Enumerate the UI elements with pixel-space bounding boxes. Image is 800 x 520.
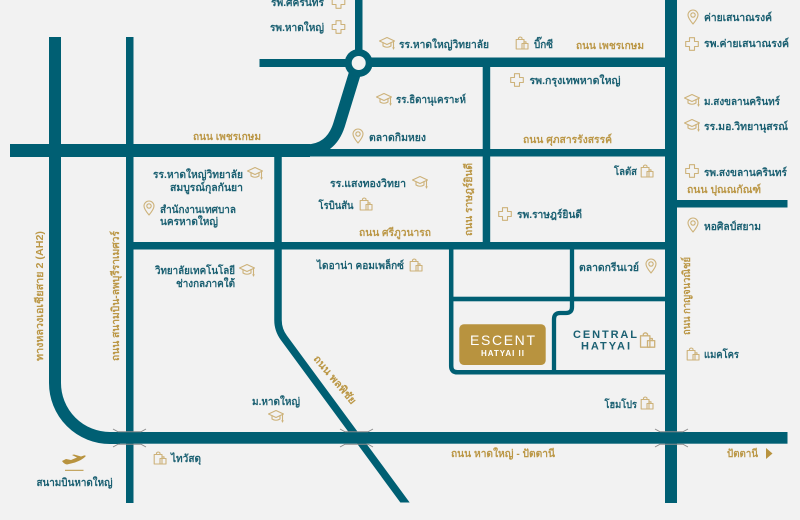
place: Kim Yong market: ตลาดกิมหยง — [369, 132, 426, 144]
place: Hatyai hospital: รพ.หาดใหญ่ — [270, 20, 324, 34]
road name: Hatyai-Pattani: ถนน หาดใหญ่ - ปัตตานี — [451, 446, 556, 460]
place: Siam art gallery: หอศิลป์สยาม — [704, 220, 761, 233]
road: Phetkasem west — [10, 144, 310, 157]
place: Makro — [687, 348, 739, 361]
place: Lotus — [613, 165, 653, 178]
road name: Kanchanawanit: ถนน กาญจนวณิชย์ — [680, 257, 693, 335]
place: Senanarong camp: ค่ายเสนาณรงค์ — [704, 11, 772, 24]
place: Thai Watsadu — [154, 452, 201, 466]
place: Hatyai Wittayalai school — [380, 37, 489, 51]
label: Central Hatyai: CENTRAL — [573, 329, 637, 341]
place: Songkla hospital: รพ.สงขลานครินทร์ — [704, 166, 787, 179]
place: municipality: นครหาดใหญ่ — [160, 214, 218, 228]
place: Lotus: โลตัส — [613, 165, 638, 178]
road name: airport road: ถนน สนามบิน-ลพบุรีราเมศวร์ — [109, 231, 123, 361]
overpass marker 2 — [340, 429, 373, 447]
place: Big C: บิ๊กซี — [534, 36, 553, 51]
place: technical college: วิทยาลัยเทคโนโลยี — [154, 264, 235, 277]
place: Hatyai University — [252, 394, 300, 422]
place: technical college — [154, 264, 254, 290]
place: PSU school — [684, 120, 788, 134]
place: Thai Watsadu: ไทวัสดุ — [170, 452, 201, 466]
place: Somboon Kunkanya school: สมบูรณ์กุลกันยา — [170, 181, 243, 195]
road: project connector — [554, 249, 572, 372]
place: Robinson — [318, 198, 372, 212]
overpass marker 3 — [655, 429, 688, 447]
place: Kim Yong market — [353, 129, 426, 144]
place: Songkla University: ม.สงขลานครินทร์ — [704, 95, 780, 108]
place: Robinson: โรบินสัน — [318, 199, 354, 212]
logo: ESCENT Hatyai II: ESCENT — [470, 332, 535, 348]
logo: ESCENT Hatyai II: HATYAI II — [481, 349, 524, 358]
place: Siam art gallery — [688, 218, 761, 233]
label: Central Hatyai — [573, 329, 637, 352]
direction: Pattani — [727, 447, 772, 460]
place: Hatyai University: ม.หาดใหญ่ — [252, 394, 300, 408]
roundabout — [345, 49, 373, 77]
road: project loop — [451, 249, 665, 372]
road: top west — [260, 59, 350, 67]
road: Phetkasem curve to roundabout — [306, 63, 358, 150]
road name: Ratyindee: ถนน ราษฎร์ยินดี — [462, 163, 475, 236]
place: Hatyai Wittayalai school: รร.หาดใหญ่วิทยาลัย — [399, 37, 489, 51]
road: top east — [365, 58, 665, 67]
place: municipality: สำนักงานเทศบาล — [160, 204, 236, 216]
place: Ratyindee hospital — [499, 208, 582, 221]
road name: Punnakan: ถนน ปุณณกัณฑ์ — [687, 183, 761, 197]
place: Thida school — [376, 93, 466, 107]
place: HomePro: โฮมโปร — [604, 398, 637, 411]
place: Songkla University — [684, 94, 780, 108]
road name: Asian Highway: ทางหลวงเอเชียสาย 2 (AH2) — [33, 231, 46, 361]
road: Sriphuwanart — [133, 242, 665, 250]
place: Senanarong hospital: รพ.ค่ายเสนาณรงค์ — [704, 37, 789, 50]
road name: Phonphichai: ถนน พลพิชัย — [311, 353, 358, 407]
place: Bangkok Hospital: รพ.กรุงเทพหาดใหญ่ — [530, 73, 621, 88]
road: main north-south — [665, 0, 677, 503]
road name: Phetkasem west: ถนน เพชรเกษม — [193, 131, 261, 143]
place: Hatyai hospital — [270, 20, 345, 34]
road name: Sriphuwanart: ถนน ศรีภูวนารถ — [359, 226, 431, 240]
place: Makro: แมคโคร — [704, 348, 739, 361]
place: Greenway market: ตลาดกรีนเวย์ — [579, 261, 639, 274]
road: highway AH2 curve — [55, 37, 120, 438]
place: Thida school: รร.ธิดานุเคราะห์ — [396, 93, 466, 107]
place: Big C — [516, 36, 553, 51]
road: airport road — [126, 37, 134, 503]
road: Phetkasem east — [300, 149, 665, 156]
overpass marker 1 — [113, 429, 146, 447]
place: HomePro — [604, 397, 653, 411]
direction: Pattani: ปัตตานี — [727, 447, 759, 460]
road name: Phetkasem north: ถนน เพชรเกษม — [576, 40, 644, 52]
road: project north — [453, 297, 665, 301]
road: Phonphichai — [278, 157, 412, 512]
place: Diana Complex: ไดอาน่า คอมเพล็กซ์ — [316, 258, 404, 272]
place: Bangkok Hospital — [511, 73, 621, 88]
place: municipality — [144, 201, 236, 228]
place: Somboon Kunkanya school: รร.หาดใหญ่วิทยาลัย — [153, 167, 243, 181]
place: Senanarong camp — [688, 10, 772, 24]
place: Saengthong school: รร.แสงทองวิทยา — [330, 178, 406, 190]
place: Saengthong school — [330, 176, 428, 190]
label: Central Hatyai: HATYAI — [581, 340, 630, 352]
place: technical college: ช่างกลภาคใต้ — [176, 276, 235, 290]
place: PSU school: รร.มอ.วิทยานุสรณ์ — [704, 120, 788, 134]
road: Hatyai-Pattani — [110, 432, 788, 444]
road name: Suphasarn: ถนน ศุภสารรังสรรค์ — [523, 133, 612, 147]
place: Somboon Kunkanya school — [153, 167, 262, 195]
road: Punnakan spur — [677, 200, 788, 208]
logo: ESCENT Hatyai II — [459, 324, 546, 365]
road: Ratyindee — [483, 67, 490, 247]
place: Ratyindee hospital: รพ.ราษฎร์ยินดี — [517, 208, 582, 221]
road: north stub — [355, 0, 362, 60]
place: Hatyai airport — [36, 454, 113, 489]
icon: Central bag — [641, 333, 655, 347]
place: Greenway market — [579, 259, 656, 274]
place: Hatyai airport: สนามบินหาดใหญ่ — [36, 475, 113, 489]
place: Songkla hospital — [686, 165, 787, 179]
